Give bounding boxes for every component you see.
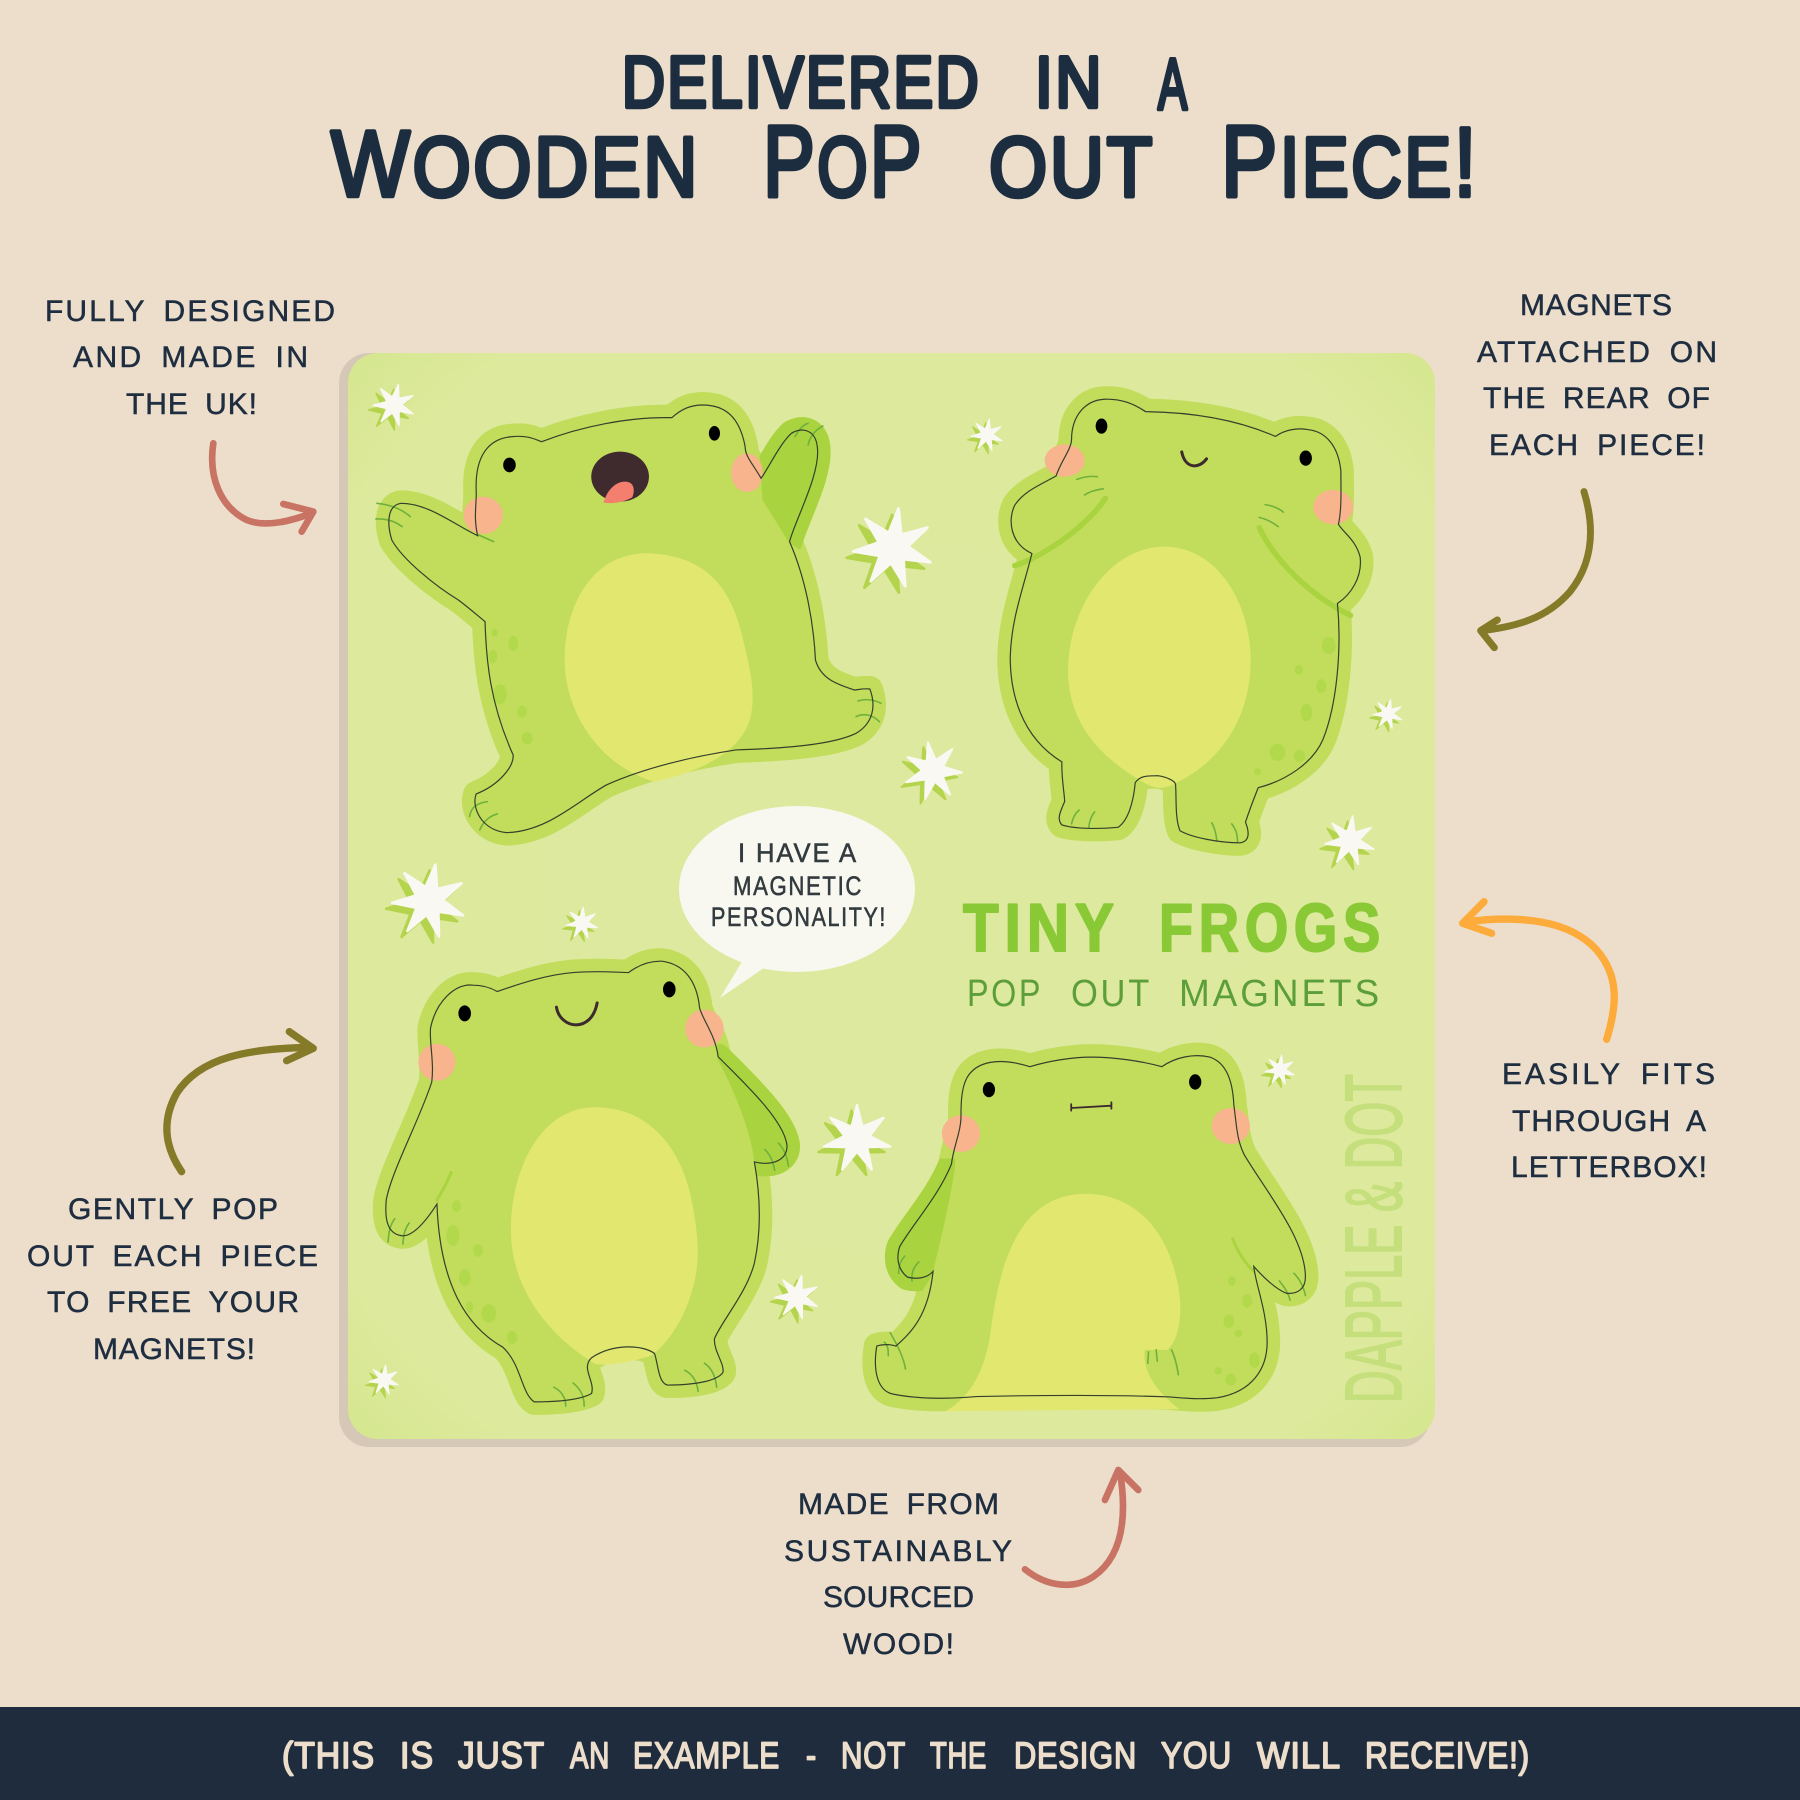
callout: sustainably sourced: MADE FROM <box>798 1488 999 1521</box>
subtitle: pop out magnets: POP <box>967 973 1043 1015</box>
footer text: DESIGN <box>1014 1735 1137 1776</box>
callout: easily fits: EASILY FITS <box>1502 1058 1715 1091</box>
title line 1: A <box>1158 45 1189 125</box>
subtitle: pop out magnets: MAGNETS <box>1179 973 1382 1015</box>
callout: sustainably sourced: SUSTAINABLY <box>784 1535 1012 1568</box>
bubble text <box>711 838 887 932</box>
footer text: RECEIVE!) <box>1365 1735 1530 1776</box>
footer text: IS <box>400 1735 434 1776</box>
title line 2: POP <box>763 106 924 218</box>
frog 3: smiling with speech bubble <box>386 961 788 1406</box>
callout: gently pop: GENTLY POP <box>68 1193 278 1226</box>
footer text: THE <box>930 1735 987 1776</box>
callout: magnets attached: ATTACHED ON <box>1477 336 1717 369</box>
callout: fully designed <box>45 295 335 421</box>
title line 1: DELIVERED <box>622 43 981 123</box>
footer text: YOU <box>1161 1735 1232 1776</box>
arrow: magnets attached <box>1481 492 1590 648</box>
arrow: sustainably sourced <box>1025 1470 1138 1585</box>
callout: fully designed: THE UK! <box>126 388 257 421</box>
footer text <box>282 1735 1530 1776</box>
title line 1: IN <box>1035 43 1104 123</box>
callout: magnets attached: THE REAR OF <box>1483 382 1710 415</box>
callout: gently pop: TO FREE YOUR <box>47 1286 299 1319</box>
callout: easily fits <box>1502 1058 1715 1184</box>
arrow: easily fits <box>1463 902 1614 1039</box>
footer text: EXAMPLE <box>633 1735 780 1776</box>
icon: sparkle stars <box>364 380 1405 1399</box>
callout: gently pop: MAGNETS! <box>93 1333 255 1366</box>
callout: gently pop <box>27 1193 318 1366</box>
footer text: (THIS <box>282 1735 375 1776</box>
frog 1: jumping <box>376 405 881 833</box>
board shadow <box>339 353 1430 1447</box>
title line 2: WOODEN <box>331 111 700 216</box>
bubble text: PERSONALITY! <box>711 902 887 932</box>
footer text: JUST <box>458 1735 545 1776</box>
board face <box>348 353 1435 1439</box>
product name: tiny frogs <box>963 890 1386 966</box>
speech bubble <box>679 806 915 998</box>
bubble text: I HAVE A <box>738 838 858 868</box>
callout: fully designed: AND MADE IN <box>73 341 308 374</box>
callout: easily fits: THROUGH A <box>1512 1105 1706 1138</box>
callout: magnets attached: EACH PIECE! <box>1489 429 1705 462</box>
product name: tiny frogs: TINY <box>963 890 1120 966</box>
subtitle: pop out magnets: OUT <box>1071 973 1152 1015</box>
footer bar <box>0 1707 1800 1800</box>
callout: magnets attached: MAGNETS <box>1520 289 1672 322</box>
frog 2: hands on cheeks <box>1010 399 1360 843</box>
callout: fully designed: FULLY DESIGNED <box>45 295 335 328</box>
arrow: fully designed <box>212 443 313 532</box>
callout: sustainably sourced: WOOD! <box>843 1628 954 1661</box>
callout: easily fits: LETTERBOX! <box>1511 1151 1707 1184</box>
callout: sustainably sourced: SOURCED <box>823 1581 974 1614</box>
callout: sustainably sourced <box>784 1488 1012 1661</box>
panel: wooden board <box>339 353 1435 1447</box>
footer text: - <box>806 1735 817 1776</box>
title <box>331 43 1479 218</box>
product name: tiny frogs: FROGS <box>1159 890 1386 966</box>
footer text: NOT <box>841 1735 906 1776</box>
footer text: WILL <box>1257 1735 1341 1776</box>
subtitle: pop out magnets <box>967 973 1382 1015</box>
callout: gently pop: OUT EACH PIECE <box>27 1240 318 1273</box>
bubble text: MAGNETIC <box>733 871 863 901</box>
frog 4: sitting <box>875 1056 1305 1411</box>
title line 2: OUT <box>989 120 1155 214</box>
title line 2: PIECE! <box>1221 106 1479 218</box>
footer text: AN <box>570 1735 610 1776</box>
brand: dapple and dot: DAPPLE & DOT <box>1329 1074 1418 1403</box>
arrow: gently pop <box>167 1032 313 1172</box>
callout: magnets attached <box>1477 289 1717 462</box>
title line 2 <box>331 106 1479 218</box>
